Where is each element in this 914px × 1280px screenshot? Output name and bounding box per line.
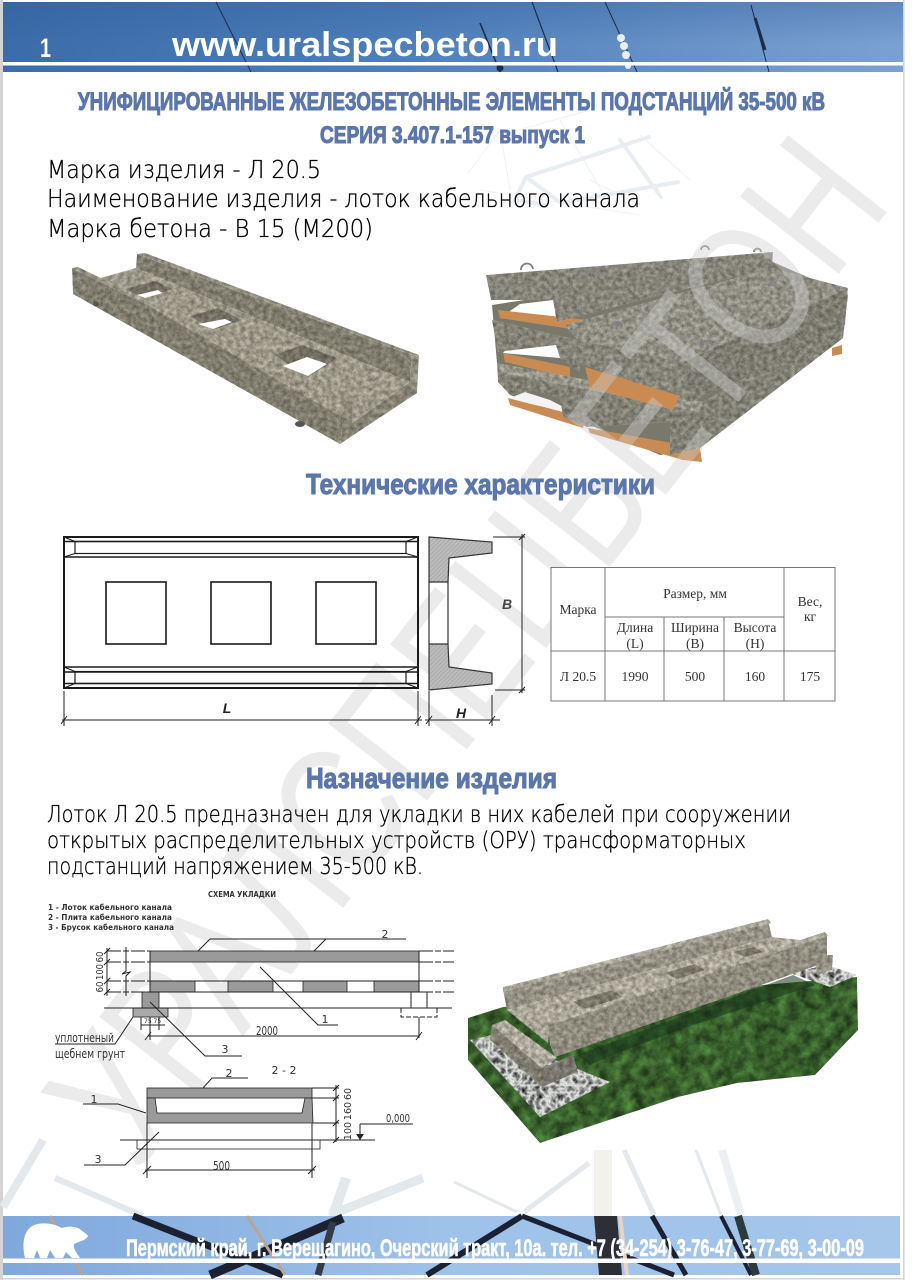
background: faint tower behind title — [468, 110, 690, 215]
section view — [429, 537, 492, 690]
dimension lines — [61, 534, 525, 726]
concrete block and tray — [490, 919, 833, 1087]
plan view — [64, 537, 418, 688]
product details text: Наименование изделия - лоток кабельного канала — [47, 184, 640, 213]
legend — [48, 902, 174, 932]
scheme heading: СХЕМА УКЛАДКИ — [208, 890, 276, 899]
diagram: laying scheme: 60 — [95, 952, 106, 962]
diagram: laying scheme: 0,000 — [386, 1112, 410, 1125]
drawing: tray plan and section with dimensions: H — [456, 705, 467, 721]
table: sizes and weight: 175 — [800, 669, 820, 684]
heading: technical characteristics: Технические характеристики — [306, 469, 655, 501]
title — [78, 86, 825, 149]
diagram: laying scheme: уплотненый — [55, 1031, 114, 1045]
drawing: tray plan and section with dimensions: L — [223, 700, 231, 716]
diagram: laying scheme: 75 75 — [144, 1018, 161, 1025]
page number: 1 — [40, 33, 51, 63]
header band — [3, 2, 903, 72]
table: sizes and weight: Размер, мм — [663, 586, 727, 601]
lifting loops — [521, 246, 840, 347]
cross section 2-2: 2 - 2 — [272, 1064, 296, 1077]
diagram: laying scheme: 2000 — [256, 1024, 278, 1038]
shadow under tray — [577, 975, 815, 1065]
diagram: laying scheme: 160 — [343, 1102, 354, 1120]
diagram: laying scheme: 3 — [222, 1043, 228, 1056]
product details text: Марка бетона - В 15 (М200) — [47, 214, 373, 243]
diagram: laying scheme: 60 — [343, 1088, 354, 1100]
table: sizes and weight: 500 — [685, 669, 705, 684]
diagram: laying scheme: щебнем грунт — [55, 1047, 125, 1061]
purpose paragraph — [47, 802, 791, 880]
diagram: laying scheme: 1 — [322, 1013, 328, 1026]
table: sizes and weight — [551, 568, 835, 701]
longitudinal section — [133, 951, 419, 1017]
table: sizes and weight: 160 — [745, 669, 765, 684]
table: sizes and weight: Марка — [559, 602, 597, 617]
heading: product purpose: Назначение изделия — [306, 763, 557, 795]
timber support over the lower slab — [585, 367, 680, 410]
grass — [468, 977, 858, 1143]
wires in header — [216, 2, 769, 72]
table: sizes and weight: Длина — [617, 620, 653, 635]
diagram: laying scheme: 60 — [95, 982, 106, 992]
gravel — [470, 1035, 610, 1117]
purpose paragraph: подстанций напряжением 35-500 кВ. — [47, 854, 423, 880]
diagram: laying scheme: 2 — [226, 1067, 232, 1080]
legend: 3 - Брусок кабельного канала — [48, 922, 174, 932]
dark mass between slabs — [492, 262, 848, 455]
product details text — [47, 155, 640, 243]
diagram: laying scheme: 1 — [90, 1093, 98, 1106]
purpose paragraph: Лоток Л 20.5 предназначен для укладки в них кабелей при сооружении — [47, 802, 791, 828]
table: sizes and weight: кг — [804, 609, 817, 624]
table: sizes and weight: 1990 — [622, 669, 649, 684]
diagram: laying scheme: 500 — [213, 1159, 230, 1173]
table: sizes and weight: (L) — [626, 636, 644, 651]
diagram: laying scheme: 2 — [382, 928, 388, 941]
background: faint tower struts at the bottom of the page — [3, 1140, 741, 1216]
legend: 1 - Лоток кабельного канала — [48, 902, 172, 912]
drawing: tray plan and section with dimensions — [61, 534, 525, 726]
table: sizes and weight: Л 20.5 — [560, 669, 596, 684]
subtitle: series: СЕРИЯ 3.407.1-157 выпуск 1 — [320, 122, 585, 149]
website address: www.uralspecbeton.ru — [171, 26, 558, 64]
diagram: laying scheme — [48, 890, 454, 1178]
photo: stacked slabs on timber — [486, 246, 848, 462]
table: sizes and weight: Ширина — [671, 620, 719, 635]
icon: polar bear — [23, 1223, 88, 1258]
insulators — [617, 34, 631, 69]
diagram: laying scheme: 100 — [95, 964, 106, 980]
drawing: tray plan and section with dimensions: B — [502, 596, 512, 612]
legend: 2 - Плита кабельного канала — [48, 912, 172, 922]
product details text: Марка изделия - Л 20.5 — [47, 155, 321, 184]
table: sizes and weight: Вес, — [798, 594, 822, 609]
footer band — [3, 1216, 900, 1275]
diagram: laying scheme: 3 — [94, 1153, 102, 1166]
photo: single cable channel tray — [72, 253, 419, 444]
timber supports — [498, 277, 843, 462]
purpose paragraph: открытых распределительных устройств (ОРУ) трансформаторных — [47, 828, 746, 854]
photo: tray installed on grass and gravel — [468, 919, 858, 1143]
table: sizes and weight: (B) — [686, 636, 704, 651]
tower silhouette in footer — [50, 1216, 756, 1275]
table: sizes and weight: (H) — [746, 636, 764, 651]
diagram: laying scheme: 100 — [343, 1122, 354, 1140]
table: sizes and weight: Высота — [734, 620, 776, 635]
